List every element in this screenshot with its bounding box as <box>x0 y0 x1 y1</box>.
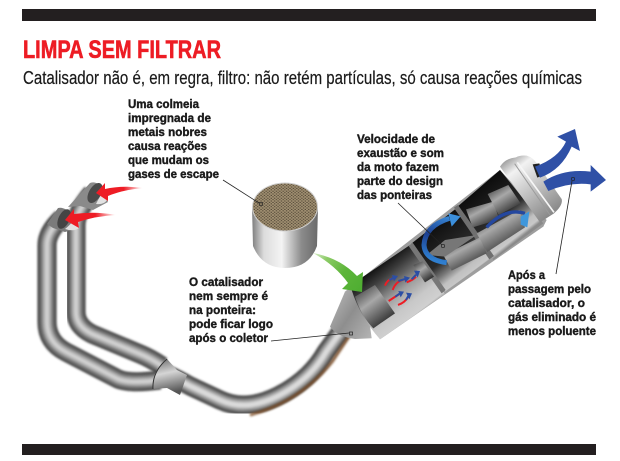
result text: gás eliminado é <box>508 310 596 324</box>
position text: após o coletor <box>189 331 268 345</box>
swirl arrow: small <box>487 211 529 227</box>
red arrow: upper inlet <box>96 183 143 201</box>
upper inner tube <box>466 202 499 227</box>
section three <box>457 170 543 260</box>
leader line <box>556 181 572 274</box>
position text <box>189 275 273 345</box>
swirl arrow: large <box>424 213 461 263</box>
pipe inlet: front <box>47 207 79 232</box>
honeycomb text: causa reações <box>128 139 207 153</box>
leader dot <box>350 332 352 335</box>
bottom bar <box>22 444 596 455</box>
cap ring highlight <box>517 162 554 212</box>
honeycomb text: metais nobres <box>128 125 207 139</box>
honeycomb text: Uma colmeia <box>128 97 199 111</box>
cylinder side <box>252 207 318 268</box>
honeycomb text <box>128 97 219 181</box>
catalyst honeycomb cylinder <box>252 182 318 268</box>
collector pipe <box>165 326 345 405</box>
cap ring shadow <box>515 164 550 215</box>
design text <box>357 132 444 202</box>
design text: das ponteiras <box>357 188 432 202</box>
small flow arrows <box>385 275 416 305</box>
pipe junction <box>153 359 187 395</box>
title: LIMPA SEM FILTRAR <box>23 36 221 64</box>
exhaust pipes <box>47 193 352 415</box>
leader dot <box>441 244 445 248</box>
flow arrowheads <box>392 271 420 299</box>
exit arrow: upper <box>535 129 580 178</box>
top bar <box>22 9 596 21</box>
section one <box>352 245 445 339</box>
result text: menos poluente <box>508 324 596 338</box>
callout: honeycomb <box>128 97 263 206</box>
leader dot <box>571 177 575 181</box>
muffler <box>330 170 547 339</box>
design text: Velocidade de <box>357 132 435 146</box>
pipe inlet: rear <box>68 180 108 210</box>
callout: exhaust result <box>508 177 596 338</box>
callout: tailpipe design <box>357 132 445 248</box>
lower inner tube <box>477 210 525 252</box>
leader line <box>223 180 259 203</box>
partition one <box>409 243 446 293</box>
exit arrow: lower <box>543 165 606 192</box>
inner tube <box>443 237 487 271</box>
cone tip <box>427 235 477 257</box>
red arrow: lower inlet <box>65 209 116 228</box>
outlet opening <box>533 163 543 178</box>
rust tint <box>250 332 352 415</box>
design text: parte do design <box>357 174 443 188</box>
small connector <box>413 261 434 282</box>
end cap <box>500 156 562 222</box>
honeycomb text: que mudam os <box>128 153 209 167</box>
leader line <box>271 333 349 341</box>
result text <box>508 268 596 338</box>
position text: O catalisador <box>189 275 263 289</box>
honeycomb text: gases de escape <box>128 167 219 181</box>
muffler body <box>352 170 547 339</box>
result text: catalisador, o <box>508 296 585 310</box>
leader dot <box>259 202 263 206</box>
result text: passagem pelo <box>508 282 591 296</box>
front pipe <box>47 218 160 382</box>
honeycomb text: impregnada de <box>128 111 211 125</box>
cone <box>330 277 372 339</box>
green arrow <box>313 253 363 292</box>
position text: pode ficar logo <box>189 317 273 331</box>
position text: nem sempre é <box>189 289 268 303</box>
design text: da moto fazem <box>357 160 439 174</box>
result text: Após a <box>508 268 545 282</box>
rear pipe <box>76 193 162 366</box>
rear inner tube <box>488 185 521 215</box>
partition two <box>454 205 494 259</box>
muffler outlet <box>500 129 606 222</box>
position text: na ponteira: <box>189 303 256 317</box>
section two <box>412 209 491 292</box>
callout: catalyst position <box>189 275 352 345</box>
design text: exaustão e som <box>357 146 444 160</box>
honeycomb face <box>252 182 318 232</box>
leader line <box>398 203 442 245</box>
catalyst block <box>355 285 395 328</box>
